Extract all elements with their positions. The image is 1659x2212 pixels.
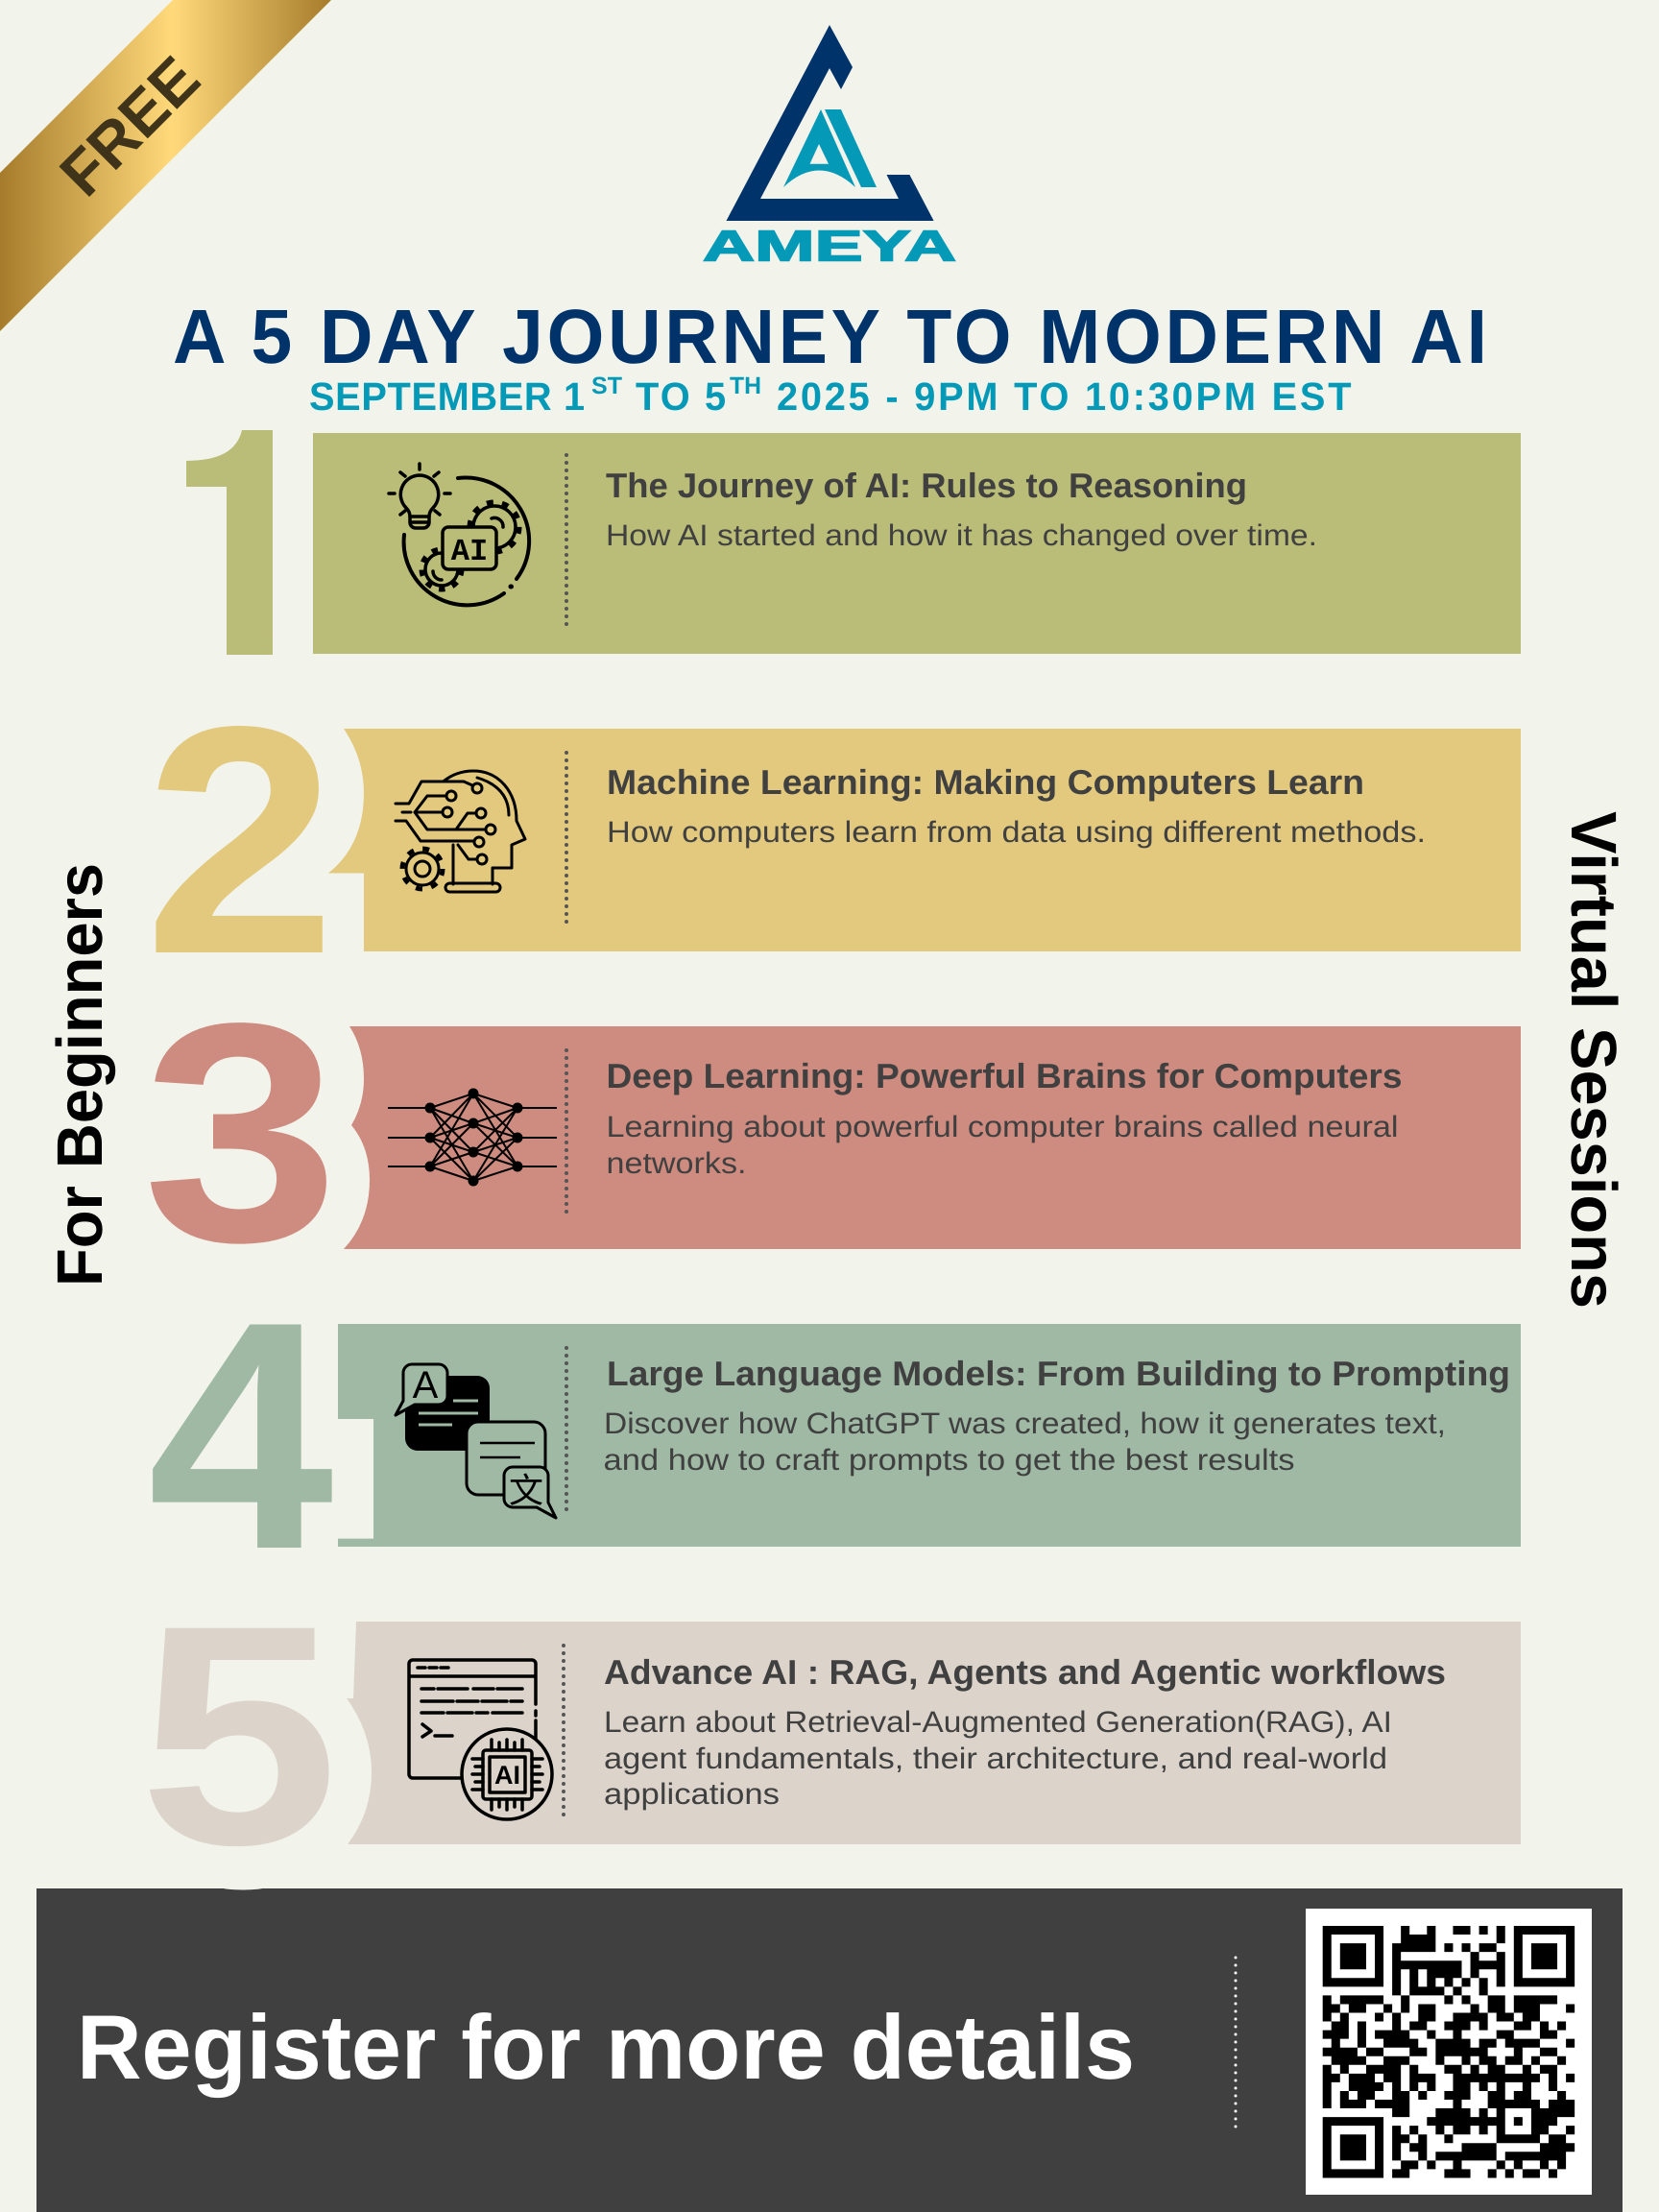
subtitle: dates and time: ST <box>591 373 622 399</box>
description: and how to craft prompts to get the best results <box>603 1443 1294 1477</box>
description: Discover how ChatGPT was created, how it generates text, <box>604 1407 1446 1440</box>
description: Learning about powerful computer brains called neural <box>607 1110 1398 1143</box>
side label: Virtual Sessions: Virtual Sessions <box>1557 811 1629 1309</box>
divider <box>565 753 568 923</box>
panel: day 5 <box>138 1562 1521 1912</box>
heading: Advance AI : RAG, Agents and Agentic workflows <box>604 1652 1446 1692</box>
heading: Deep Learning: Powerful Brains for Computers <box>607 1056 1402 1095</box>
call to action: Register for more details <box>77 1997 1135 2099</box>
heading: The Journey of AI: Rules to Reasoning <box>606 466 1247 505</box>
description: Learn about Retrieval-Augmented Generation(RAG), AI <box>604 1705 1392 1739</box>
description <box>603 1407 1446 1477</box>
bar 5 <box>347 1622 1521 1844</box>
icon: AI head with circuits <box>396 771 525 892</box>
description: networks. <box>607 1146 747 1180</box>
side label: For Beginners: For Beginners <box>44 863 116 1286</box>
description <box>607 1110 1398 1180</box>
subtitle: dates and time <box>309 373 1351 419</box>
bar 1 <box>313 433 1521 654</box>
QR code <box>1306 1909 1592 2195</box>
panel: day 3 <box>142 960 1521 1310</box>
logo: Ameya <box>703 25 956 271</box>
bar 4 <box>338 1324 1521 1547</box>
numeral 4: 4 <box>148 1256 335 1619</box>
subtitle: dates and time: TO 5 <box>636 374 726 419</box>
ribbon: FREE <box>0 0 331 331</box>
icon: translation chat bubbles <box>396 1364 556 1518</box>
divider <box>565 455 568 626</box>
logo: Ameya: AMEYA <box>703 221 956 271</box>
description <box>604 1705 1392 1811</box>
icon: neural network <box>388 1089 557 1187</box>
title: A 5 DAY JOURNEY TO MODERN AI <box>173 294 1487 379</box>
bar 2 <box>328 729 1521 951</box>
numeral 3: 3 <box>142 960 339 1310</box>
subtitle: dates and time: SEPTEMBER 1 <box>309 374 585 419</box>
divider <box>562 1646 565 1815</box>
heading: Large Language Models: From Building to Prompting <box>607 1354 1510 1393</box>
description: applications <box>604 1777 780 1811</box>
icon: translation chat bubbles: 文 <box>509 1463 543 1513</box>
divider <box>565 1348 568 1517</box>
heading: Machine Learning: Making Computers Learn <box>607 762 1364 802</box>
divider <box>565 1050 568 1219</box>
icon text: AI: AI <box>494 1761 520 1790</box>
description: How computers learn from data using different methods. <box>607 815 1426 849</box>
icon text: AI: AI <box>451 534 488 569</box>
panel: day 1 <box>186 430 1521 655</box>
panel: registration footer <box>36 1886 1623 2212</box>
bar 3 <box>344 1026 1521 1249</box>
ribbon: FREE: FREE <box>46 43 213 209</box>
subtitle: dates and time: TH <box>730 373 761 399</box>
numeral 2: 2 <box>144 661 336 1023</box>
icon: AI lightbulb and gears <box>389 464 529 605</box>
icon: translation chat bubbles: A <box>413 1364 439 1407</box>
description: agent fundamentals, their architecture, and real-world <box>604 1742 1387 1775</box>
icon: code window with AI chip <box>409 1660 552 1819</box>
panel: day 4 <box>148 1256 1521 1619</box>
numeral 1: 1 <box>149 366 324 725</box>
description: How AI started and how it has changed over time. <box>606 518 1317 552</box>
panel: day 2 <box>144 661 1521 1023</box>
subtitle: dates and time: 2025 - 9PM TO 10:30PM EST <box>777 374 1351 419</box>
divider <box>1235 1958 1237 2129</box>
numeral 5: 5 <box>138 1562 339 1912</box>
